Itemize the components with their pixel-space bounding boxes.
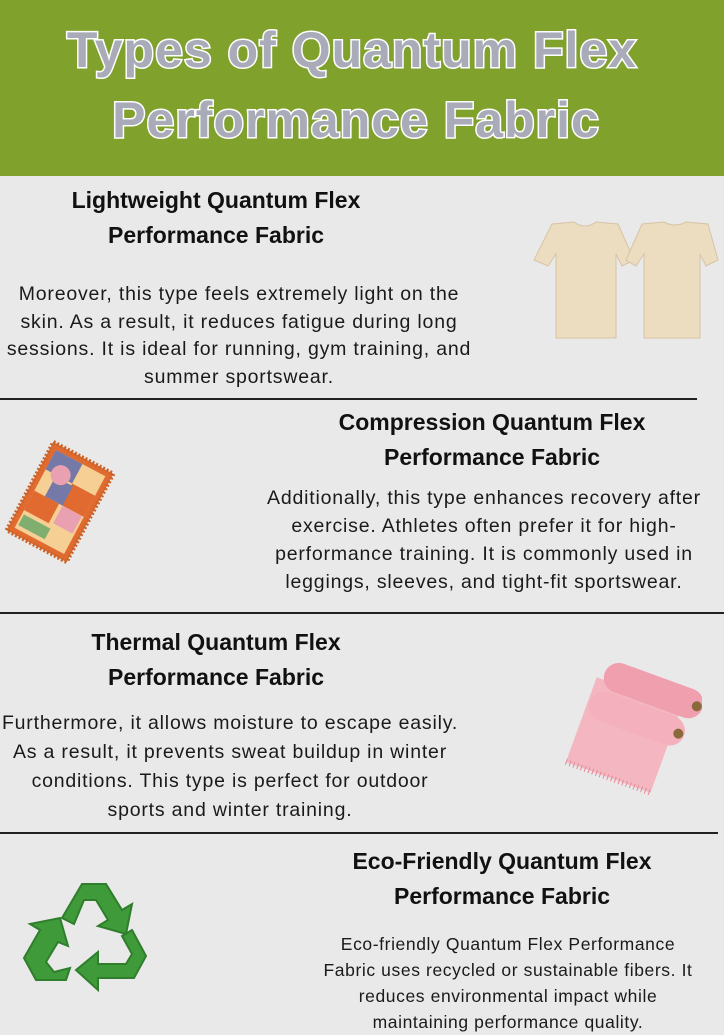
icon: t-shirts bbox=[533, 222, 718, 338]
text 4: Fabric uses recycled or sustainable fibers. It bbox=[324, 960, 692, 980]
text 1: skin. As a result, it reduces fatigue during long bbox=[20, 310, 458, 332]
icon: rug bbox=[4, 440, 116, 564]
section 1: lightweight bbox=[7, 187, 718, 388]
section 3: thermal bbox=[2, 629, 702, 821]
text 2: Additionally, this type enhances recovery after bbox=[267, 487, 701, 509]
heading 3: Thermal Quantum Flex bbox=[91, 629, 341, 655]
heading 1 bbox=[72, 187, 360, 248]
heading 1: Lightweight Quantum Flex bbox=[72, 187, 360, 213]
heading 4 bbox=[352, 848, 652, 909]
heading 2: Compression Quantum Flex bbox=[339, 409, 645, 435]
title: Performance Fabric bbox=[112, 92, 600, 148]
icon: pink blanket bbox=[565, 662, 702, 795]
text 4: reduces environmental impact while bbox=[359, 986, 657, 1006]
text 3: sports and winter training. bbox=[108, 799, 352, 821]
text 4: Eco-friendly Quantum Flex Performance bbox=[341, 934, 675, 954]
text 2: leggings, sleeves, and tight-fit sportswear. bbox=[285, 571, 683, 593]
heading 3: Performance Fabric bbox=[108, 664, 324, 690]
title bbox=[66, 22, 638, 148]
text 3 bbox=[2, 712, 458, 821]
text 3: Furthermore, it allows moisture to escape easily. bbox=[2, 712, 458, 734]
heading 2: Performance Fabric bbox=[384, 444, 600, 470]
text 1: sessions. It is ideal for running, gym training, and bbox=[7, 338, 471, 360]
text 3: As a result, it prevents sweat buildup in winter bbox=[13, 741, 447, 763]
section 4: eco-friendly bbox=[22, 848, 692, 1032]
heading 2 bbox=[339, 409, 646, 470]
text 1 bbox=[7, 283, 471, 388]
text 1: summer sportswear. bbox=[144, 366, 334, 388]
heading 1: Performance Fabric bbox=[108, 222, 324, 248]
text 4: maintaining performance quality. bbox=[373, 1012, 643, 1032]
heading 3 bbox=[91, 629, 341, 690]
text 2: exercise. Athletes often prefer it for high- bbox=[291, 515, 677, 537]
section 2: compression bbox=[4, 409, 701, 593]
text 2 bbox=[267, 487, 701, 593]
title: Types of Quantum Flex bbox=[67, 22, 637, 78]
text 3: conditions. This type is perfect for outdoor bbox=[32, 770, 428, 792]
heading 4: Eco-Friendly Quantum Flex bbox=[352, 848, 652, 874]
icon: recycle bbox=[22, 883, 148, 992]
text 1: Moreover, this type feels extremely light on the bbox=[19, 283, 459, 305]
text 2: performance training. It is commonly used in bbox=[275, 543, 693, 565]
heading 4: Performance Fabric bbox=[394, 883, 610, 909]
text 4 bbox=[324, 934, 692, 1032]
header banner bbox=[0, 0, 724, 176]
